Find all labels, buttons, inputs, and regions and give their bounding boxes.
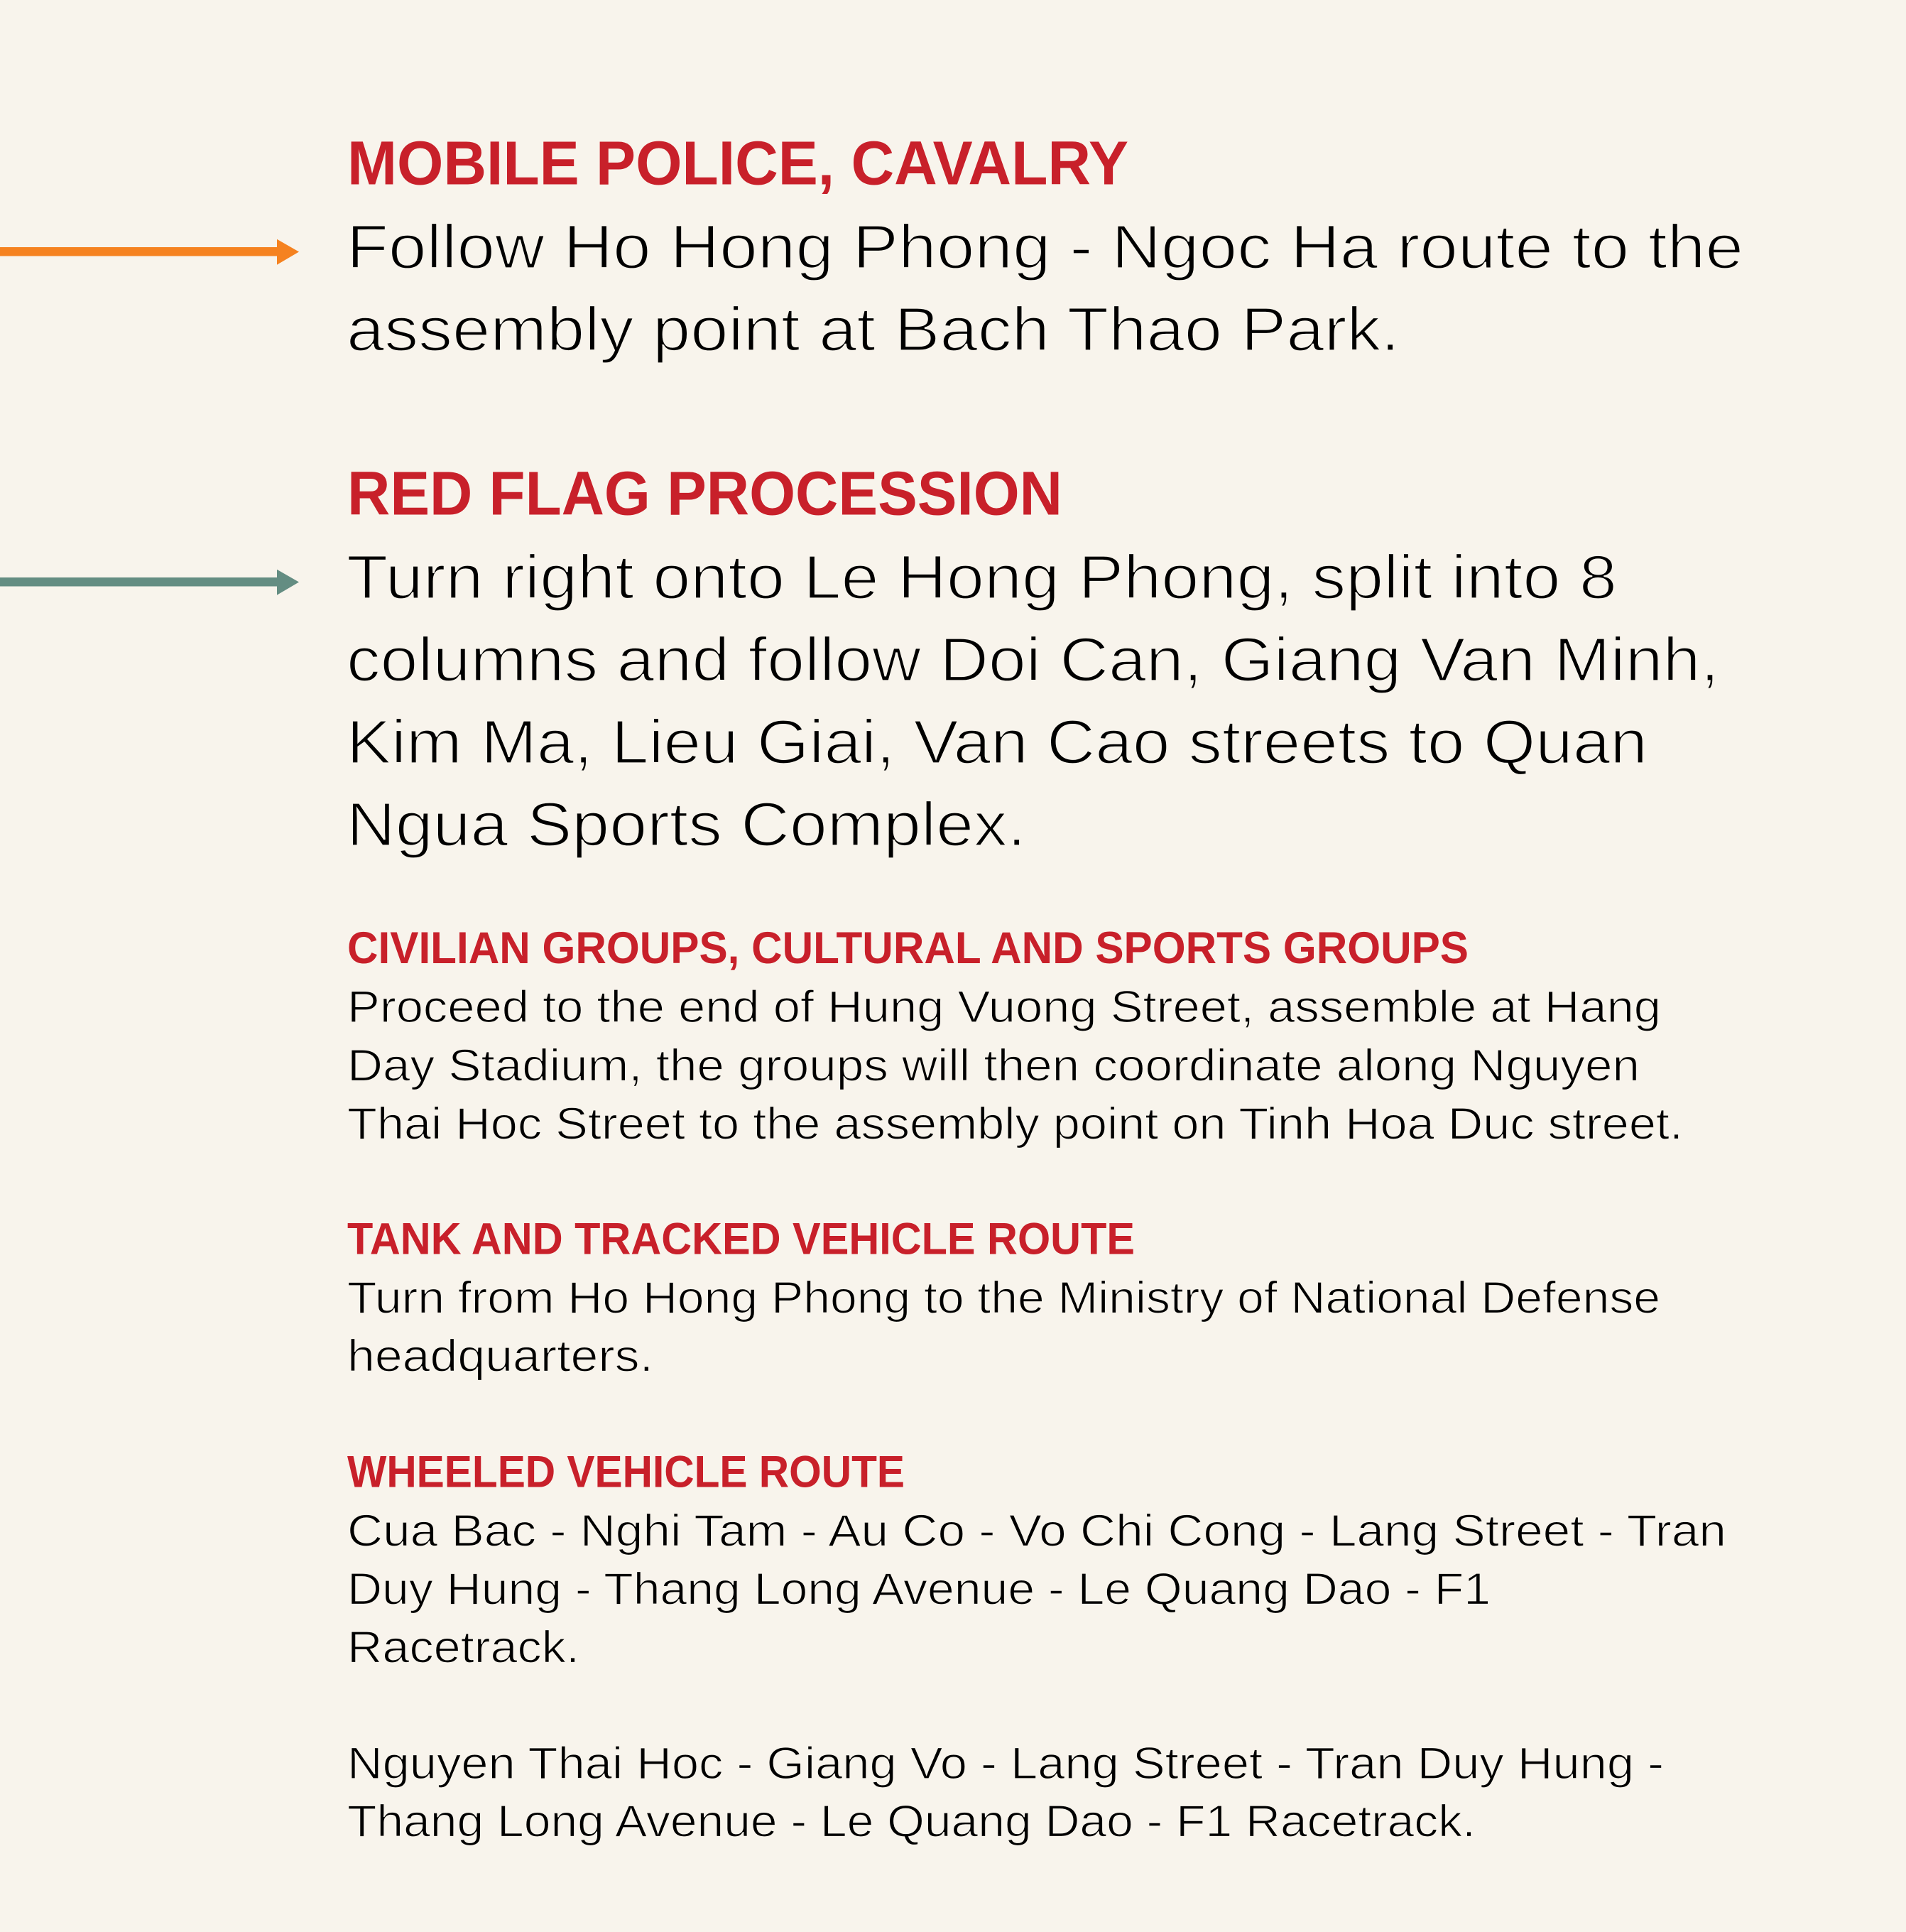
text: mobile police route: assembly point at Bach Thao Park. (347, 295, 1400, 364)
text: wheeled vehicle route two (347, 1739, 1664, 1847)
text: wheeled vehicle route one: Racetrack. (347, 1622, 579, 1672)
text: wheeled vehicle route one: Duy Hung - Thang Long Avenue - Le Quang Dao - F1 (347, 1564, 1491, 1614)
text: tank route: Turn from Ho Hong Phong to the Ministry of National Defense (347, 1273, 1660, 1323)
block: civilian groups (347, 923, 1683, 1149)
heading: mobile police, cavalry: MOBILE POLICE, CAVALRY (347, 129, 1128, 197)
text: civilian groups route: Thai Hoc Street to the assembly point on Tinh Hoa Duc street. (347, 1099, 1683, 1149)
arrow: orange route marker (0, 239, 299, 265)
text: wheeled vehicle route two: Nguyen Thai Hoc - Giang Vo - Lang Street - Tran Duy Hung - (347, 1739, 1664, 1789)
text: red flag procession route: columns and follow Doi Can, Giang Van Minh, (347, 625, 1719, 695)
block: tank and tracked vehicle route (347, 1215, 1660, 1382)
text: tank route: headquarters. (347, 1332, 653, 1382)
text: mobile police route: Follow Ho Hong Phong - Ngoc Ha route to the (347, 213, 1743, 281)
text: mobile police route (347, 213, 1743, 364)
text: red flag procession route: Turn right onto Le Hong Phong, split into 8 (347, 543, 1617, 612)
text: red flag procession route (347, 543, 1719, 859)
heading: tank and tracked vehicle route: TANK AND TRACKED VEHICLE ROUTE (347, 1215, 1135, 1264)
block: mobile police, cavalry (347, 129, 1743, 364)
text: civilian groups route: Day Stadium, the groups will then coordinate along Nguyen (347, 1041, 1640, 1090)
heading: red flag procession: RED FLAG PROCESSION (347, 459, 1062, 528)
text: red flag procession route: Kim Ma, Lieu Giai, Van Cao streets to Quan (347, 707, 1648, 777)
text: tank route (347, 1273, 1660, 1382)
arrow: teal route marker (0, 570, 299, 595)
block: red flag procession (347, 459, 1719, 859)
block: wheeled vehicle route (347, 1447, 1726, 1847)
heading: wheeled vehicle route: WHEELED VEHICLE ROUTE (347, 1447, 905, 1497)
text: wheeled vehicle route one: Cua Bac - Nghi Tam - Au Co - Vo Chi Cong - Lang Street - Tran (347, 1506, 1726, 1556)
text: civilian groups route: Proceed to the end of Hung Vuong Street, assemble at Hang (347, 982, 1661, 1032)
text: wheeled vehicle route one (347, 1506, 1726, 1672)
text: red flag procession route: Ngua Sports Complex. (347, 790, 1026, 859)
text: civilian groups route (347, 982, 1683, 1149)
heading: civilian groups: CIVILIAN GROUPS, CULTURAL AND SPORTS GROUPS (347, 923, 1469, 973)
text: wheeled vehicle route two: Thang Long Avenue - Le Quang Dao - F1 Racetrack. (347, 1797, 1476, 1847)
